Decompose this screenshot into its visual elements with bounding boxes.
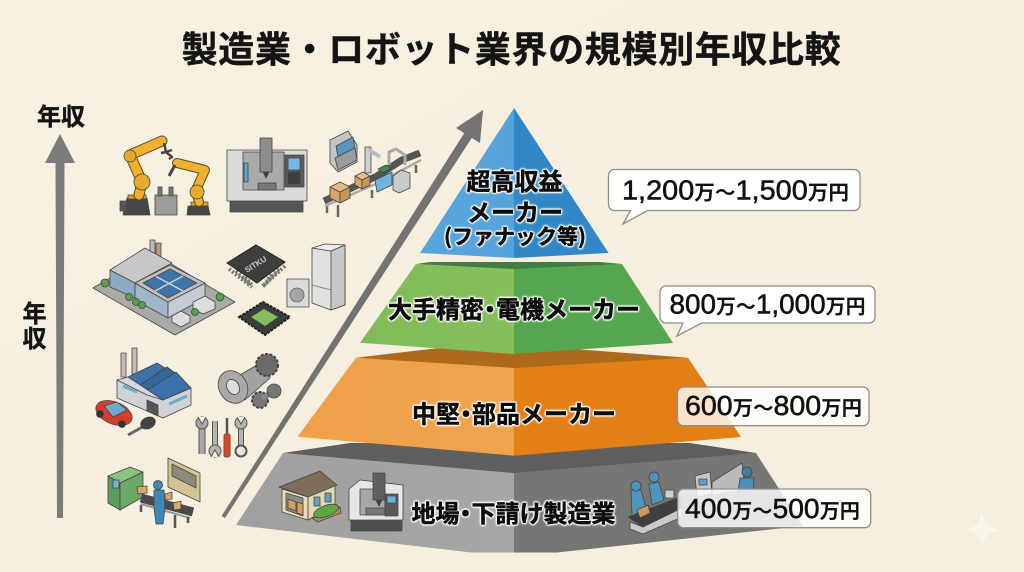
icon: yellow robot arms: [120, 141, 210, 215]
callout: 1200-1500: 1,200万～1,500万円: [622, 174, 849, 206]
tier label: ultra high profit makers: 超高収益: [466, 162, 562, 197]
tier label: major precision and electric makers: 大手精密・電機メーカー: [388, 290, 640, 325]
pyramid tier: green major makers: [360, 262, 673, 354]
axis label top: 年収: [37, 97, 85, 132]
callout: 800-1000: 800万～1,000万円: [670, 288, 866, 320]
tier label: local subcontractors: 地場・下請け製造業: [412, 494, 616, 529]
icon: blue roof factory: [117, 348, 191, 418]
icon: black microchip: [227, 245, 285, 287]
tier label: mid-size parts makers: 中堅・部品メーカー: [412, 394, 616, 430]
icon: black microchip: SITKU: [243, 254, 268, 275]
arrow: diagonal rising: [222, 110, 483, 518]
icon: red car: [92, 396, 136, 430]
callout: 600-800: 600万～800万円: [685, 390, 862, 421]
icon: auto part: [128, 414, 158, 435]
axis label vertical: 収: [22, 319, 46, 354]
icon: worker at conveyor with tool board: [108, 458, 200, 528]
icon: small warehouse: [279, 471, 341, 522]
icon: green chip: [239, 302, 290, 335]
icon: conveyor line with boxes: [324, 131, 421, 217]
tier label: ultra high profit makers: [444, 162, 586, 251]
pyramid tier: orange mid-size: [298, 348, 741, 456]
icon: machining center: [227, 138, 307, 212]
callout: 400-500: 400万～500万円: [685, 493, 860, 524]
axis label vertical: [22, 294, 46, 354]
pyramid tier: gray base: [236, 443, 803, 552]
watermark sparkle: [964, 512, 1000, 548]
tier label: ultra high profit makers: (ファナック等): [444, 221, 586, 251]
callout: 1200-1500: [608, 170, 860, 224]
icon: refrigerator and washer: [287, 244, 345, 310]
icon: large factory: [93, 240, 235, 335]
title: 製造業・ロボット業界の規模別年収比較: [182, 21, 841, 73]
icon: workers at bench: [628, 463, 754, 534]
callout: 800-1000: [660, 286, 875, 336]
icon: flange and gears: [212, 354, 281, 409]
axis label vertical: 年: [22, 294, 46, 329]
icon: small machining center: [349, 473, 403, 531]
arrow: vertical income axis: [45, 134, 75, 518]
pyramid tier: blue top earners: [420, 108, 609, 258]
icon: wrenches and screwdriver: [196, 417, 247, 457]
tier label: ultra high profit makers: メーカー: [467, 193, 563, 228]
